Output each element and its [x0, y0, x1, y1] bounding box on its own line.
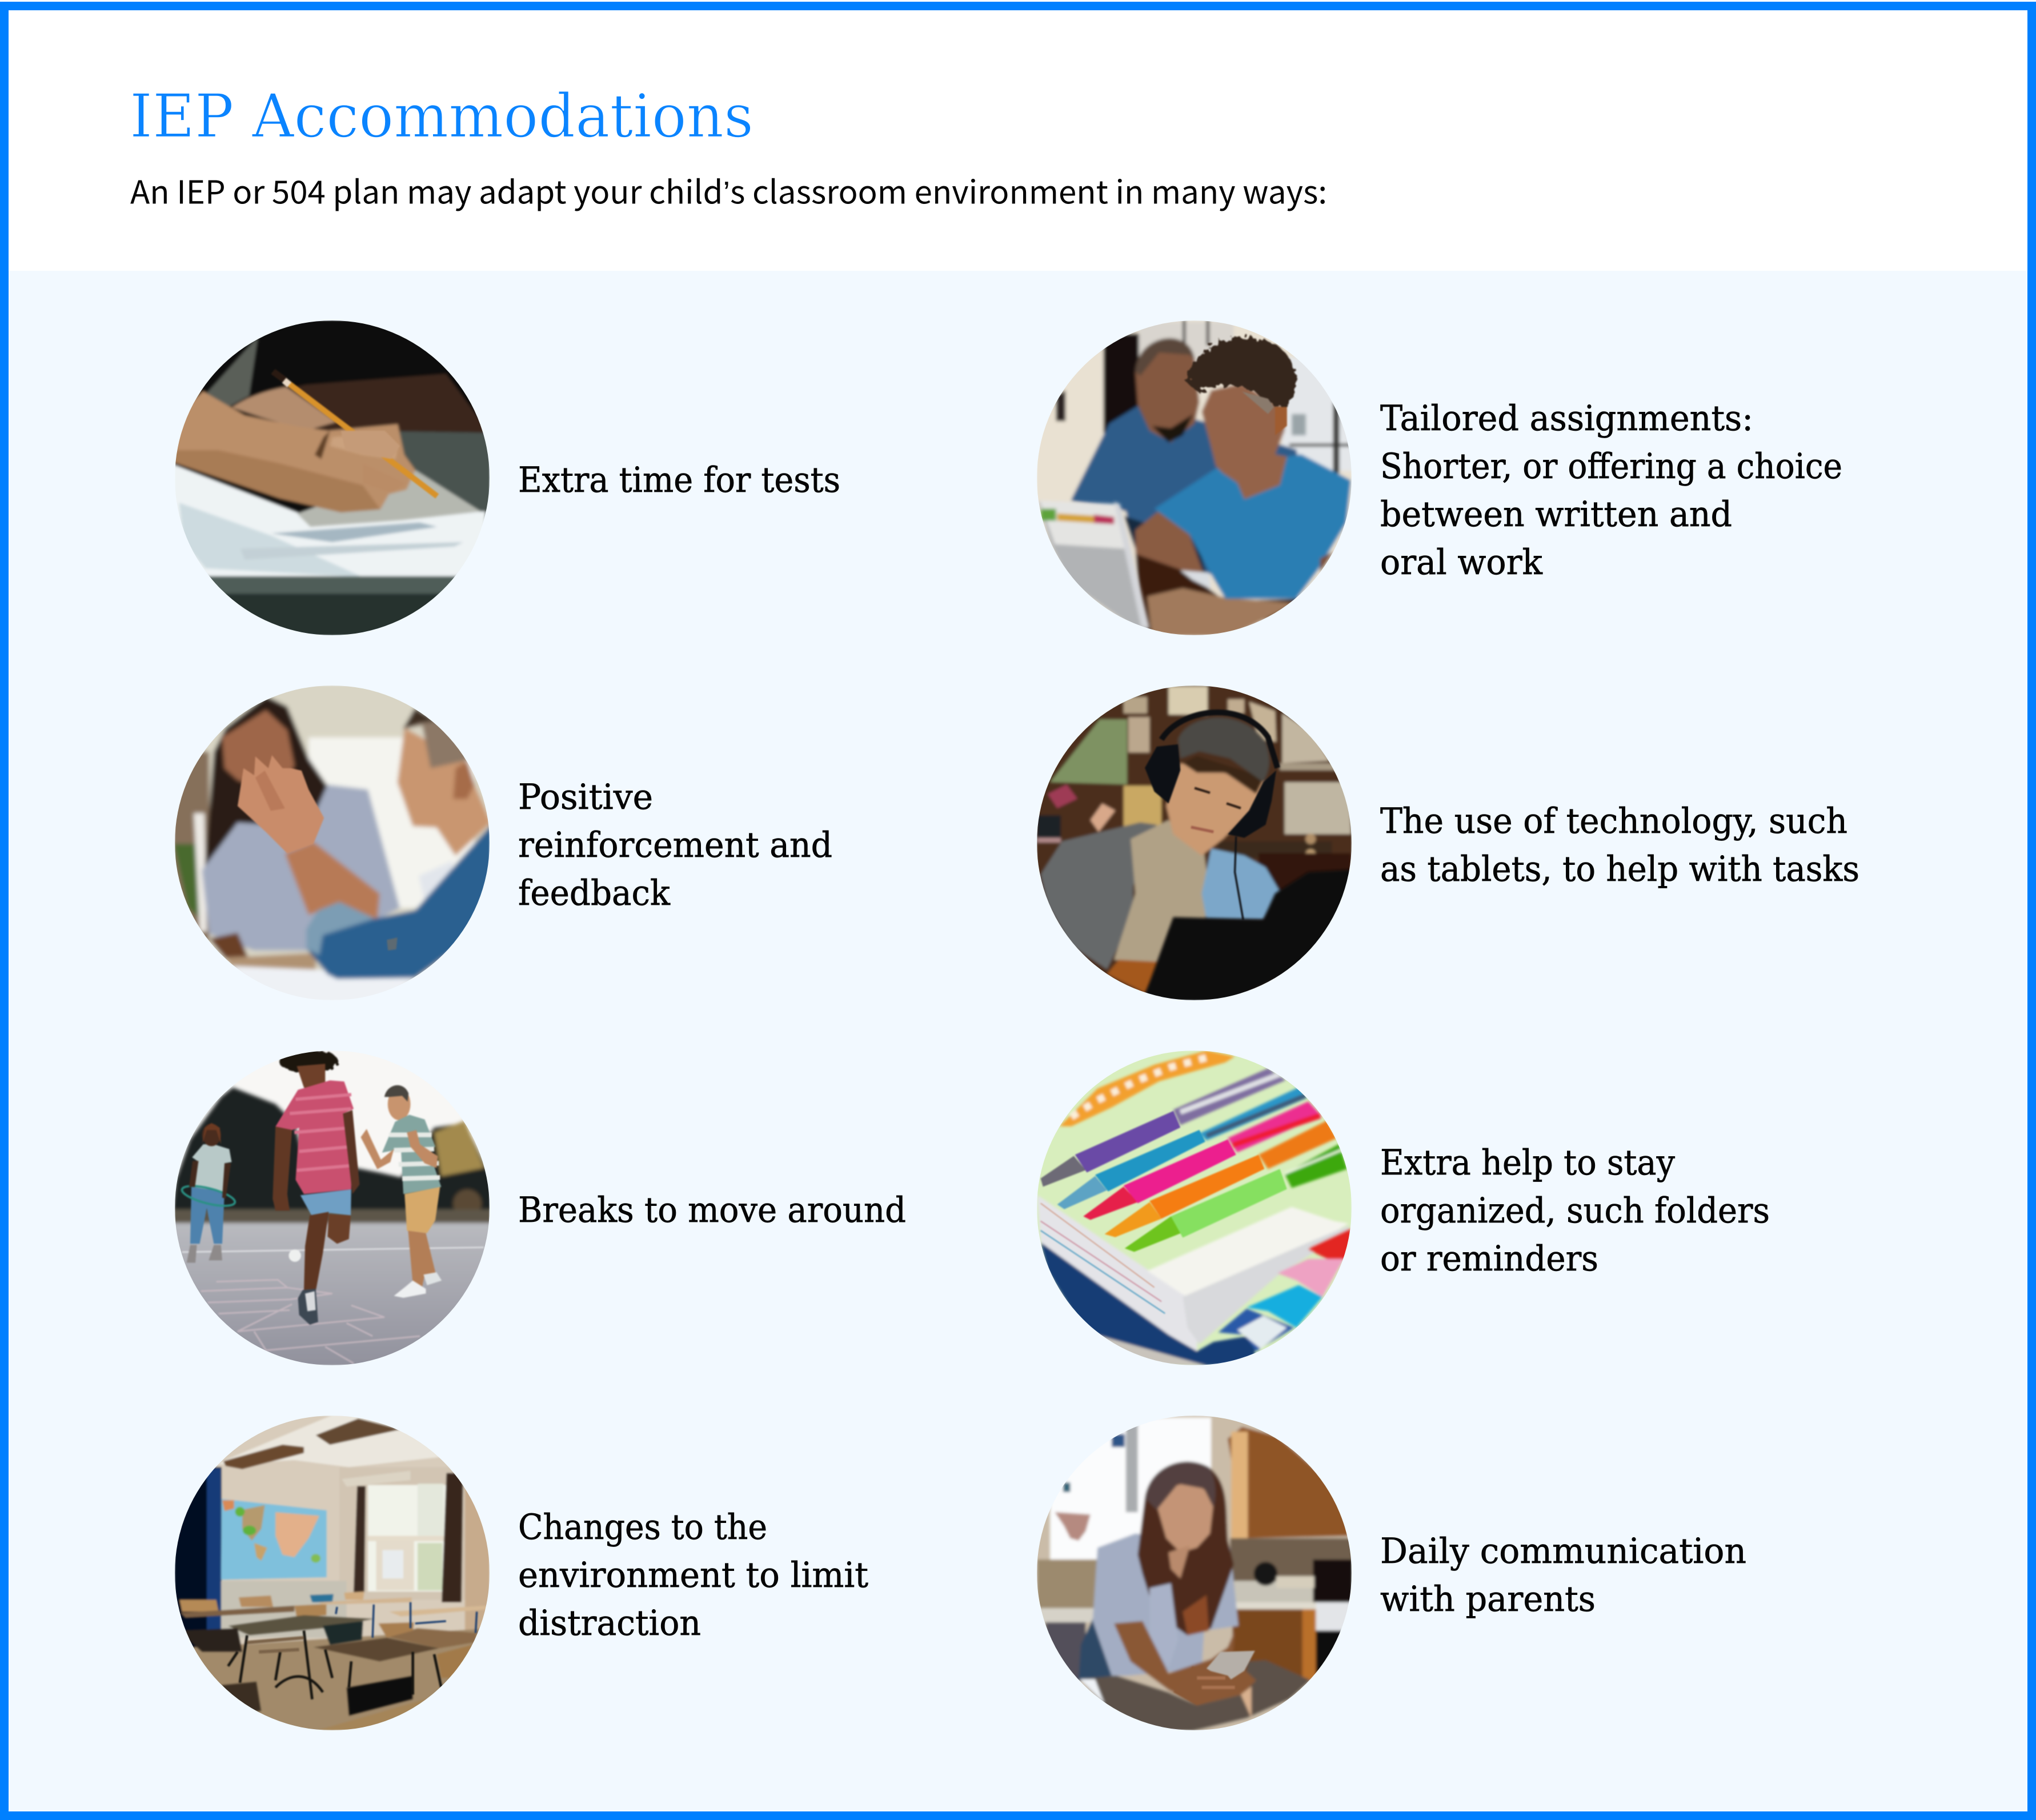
text: daily communication with parents: Daily communication	[1380, 1531, 1746, 1571]
photo: father and son at laptop	[1037, 320, 1352, 635]
text: changes to the environment to limit distraction	[518, 1507, 868, 1643]
text: breaks to move around: Breaks to move around	[518, 1189, 906, 1230]
text: the use of technology: The use of technology, such	[1380, 801, 1847, 841]
text: tailored assignments	[1380, 398, 1842, 583]
text: tailored assignments: between written and	[1380, 494, 1732, 535]
text: extra time for tests: Extra time for tests	[518, 459, 840, 500]
text: positive reinforcement and feedback: feedback	[518, 873, 670, 913]
text: changes to the environment to limit distraction: distraction	[518, 1603, 700, 1643]
photo: empty classroom with world map	[175, 1416, 490, 1730]
photo: colorful pens on notebook	[1037, 1051, 1352, 1365]
text: the use of technology	[1380, 801, 1859, 889]
text: daily communication with parents: with parents	[1380, 1579, 1595, 1619]
text: positive reinforcement and feedback	[518, 777, 832, 913]
title: IEP Accommodations	[130, 81, 754, 151]
text: positive reinforcement and feedback: Positive	[518, 777, 652, 817]
text: changes to the environment to limit distraction: Changes to the	[518, 1507, 767, 1547]
photo: woman on phone in kitchen	[1037, 1416, 1352, 1730]
photo: kids playing hopscotch	[175, 1051, 490, 1365]
text: extra help to stay organized	[1380, 1142, 1770, 1278]
text: daily communication with parents	[1380, 1531, 1746, 1619]
photo: teen with headphones and tablet	[1037, 685, 1352, 1000]
text: tailored assignments: Tailored assignments:	[1380, 398, 1753, 439]
photo: parent and child high five	[175, 685, 490, 1000]
text: tailored assignments: Shorter, or offering a choice	[1380, 446, 1842, 487]
text: positive reinforcement and feedback: reinforcement and	[518, 825, 832, 865]
text: extra help to stay organized: organized, such folders	[1380, 1190, 1770, 1230]
text: extra help to stay organized: or reminders	[1380, 1238, 1598, 1278]
text: the use of technology: as tablets, to help with tasks	[1380, 849, 1859, 889]
text: tailored assignments: oral work	[1380, 542, 1542, 583]
text: changes to the environment to limit distraction: environment to limit	[518, 1555, 868, 1595]
subtitle: An IEP or 504 plan may adapt your child’s classroom environment in many ways:	[130, 167, 1327, 214]
photo: hand writing with pencil	[175, 320, 490, 635]
text: extra help to stay organized: Extra help to stay	[1380, 1142, 1675, 1182]
